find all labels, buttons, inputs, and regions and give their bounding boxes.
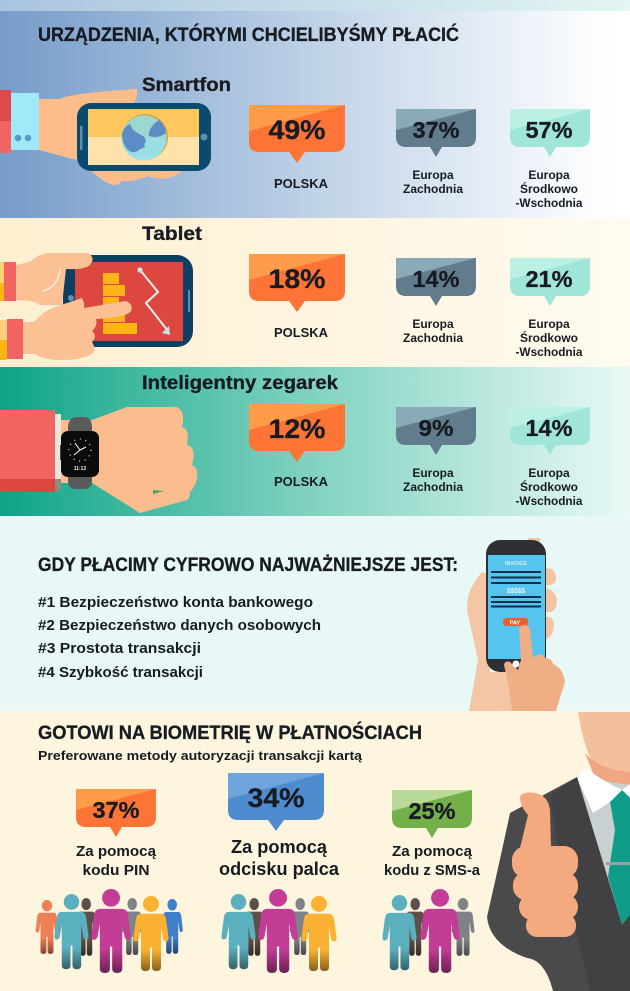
icon: hand holding smartphone	[0, 89, 211, 185]
icon: hands on tablet	[0, 253, 193, 360]
label: PIN	[76, 843, 157, 879]
bubble: PIN 37%: 37%	[92, 797, 140, 823]
bubble: Europa Zachodnia 9%	[396, 407, 476, 455]
label: SMS: kodu z SMS-a	[384, 862, 481, 879]
bubble: Polska 12%: 12%	[268, 414, 326, 444]
bubble: Europa Zachodnia 14%: 14%	[412, 266, 460, 292]
ranked list: #2 Bezpieczeństwo danych osobowych	[38, 618, 321, 634]
heading: Tablet: Tablet	[142, 224, 203, 245]
icon: hand paying with phone: INVOICE	[505, 561, 527, 567]
bubble: Polska 49%	[249, 105, 345, 163]
label: Europa Zachodnia: Zachodnia	[403, 182, 463, 196]
label: Europa Zachodnia	[403, 168, 463, 196]
heading: Inteligentny zegarek: Inteligentny zegarek	[142, 373, 338, 394]
label: Europa Środkowo-Wschodnia: Środkowo	[520, 330, 578, 345]
label: Europa Środkowo-Wschodnia	[516, 168, 583, 210]
icon: wrist with smartwatch	[0, 407, 197, 513]
panel: smartphone	[0, 0, 630, 218]
bubble: PIN 37%	[76, 789, 156, 837]
title: URZĄDZENIA, KTÓRYMI CHCIELIBYŚMY PŁACIĆ	[38, 24, 459, 46]
heading: Smartfon: Smartfon	[142, 75, 231, 96]
ranked list: #3 Prostota transakcji	[38, 641, 201, 657]
bubble: Europa Środkowo-Wschodnia 57%	[510, 109, 590, 157]
heading: GOTOWI NA BIOMETRIĘ W PŁATNOŚCIACH	[38, 722, 422, 744]
label: Europa Środkowo-Wschodnia: -Wschodnia	[516, 494, 583, 508]
bubble: Europa Środkowo-Wschodnia 14%: 14%	[526, 415, 572, 441]
people group: 37%	[36, 889, 183, 973]
panel: what matters in digital payments	[0, 516, 630, 711]
label: fingerprint	[219, 837, 340, 879]
label: Europa Środkowo-Wschodnia: Europa	[528, 466, 570, 480]
icon: hand paying with phone: $$$$$	[507, 588, 525, 595]
bubble: Europa Środkowo-Wschodnia 57%: 57%	[526, 117, 572, 143]
label: Europa Środkowo-Wschodnia	[516, 317, 583, 359]
label: PIN: Za pomocą	[76, 843, 157, 860]
bubble: Europa Środkowo-Wschodnia 14%	[510, 407, 590, 455]
label: Europa Zachodnia: Zachodnia	[403, 480, 463, 494]
label: Europa Zachodnia	[403, 317, 463, 345]
icon: hand paying with phone: PAY	[510, 620, 521, 626]
label: Europa Środkowo-Wschodnia: Środkowo	[520, 479, 578, 494]
panel: smartwatch	[0, 367, 630, 516]
label: SMS	[384, 843, 481, 879]
label: Europa Środkowo-Wschodnia: -Wschodnia	[516, 196, 583, 210]
label: Polska: POLSKA	[274, 474, 329, 489]
bubble: Europa Środkowo-Wschodnia 21%	[510, 258, 590, 306]
bubble: fingerprint 34%: 34%	[248, 783, 304, 813]
people group: 25%	[382, 889, 474, 973]
label: Europa Środkowo-Wschodnia: -Wschodnia	[516, 345, 583, 359]
label: Polska: POLSKA	[274, 325, 329, 340]
illustration: businessman thumbs up	[487, 712, 630, 991]
heading: GDY PŁACIMY CYFROWO NAJWAŻNIEJSZE JEST:	[38, 555, 458, 576]
label: fingerprint: odcisku palca	[219, 859, 340, 879]
label: Europa Środkowo-Wschodnia	[516, 466, 583, 508]
bubble: Europa Zachodnia 9%: 9%	[418, 415, 454, 441]
label: Polska: POLSKA	[274, 176, 329, 191]
label: Europa Zachodnia: Europa	[412, 466, 454, 480]
ranked list	[38, 595, 321, 681]
bubble: Polska 12%	[249, 404, 345, 462]
ranked list: #1 Bezpieczeństwo konta bankowego	[38, 595, 313, 611]
icon: wrist with smartwatch: 11:12	[74, 466, 86, 472]
bubble: SMS 25%	[392, 790, 472, 838]
label: Europa Środkowo-Wschodnia: Środkowo	[520, 181, 578, 196]
bubble: Europa Zachodnia 14%	[396, 258, 476, 306]
people group: 34%	[221, 889, 337, 973]
icon: hand paying with phone	[467, 538, 565, 711]
bubble: SMS 25%: 25%	[408, 798, 456, 824]
label: Europa Zachodnia	[403, 466, 463, 494]
panel: tablet	[0, 218, 630, 367]
ranked list: #4 Szybkość transakcji	[38, 665, 203, 681]
bubble: Polska 18%: 18%	[268, 264, 326, 294]
label: PIN: kodu PIN	[82, 862, 150, 879]
label: Europa Zachodnia: Europa	[412, 317, 454, 331]
bubble: Polska 18%	[249, 254, 345, 312]
bubble: Polska 49%: 49%	[268, 115, 326, 145]
label: fingerprint: Za pomocą	[231, 837, 328, 857]
label: Europa Zachodnia: Zachodnia	[403, 331, 463, 345]
label: Europa Środkowo-Wschodnia: Europa	[528, 168, 570, 182]
bubble: fingerprint 34%	[228, 773, 324, 831]
bubble: Europa Zachodnia 37%	[396, 109, 476, 157]
label: Europa Zachodnia: Europa	[412, 168, 454, 182]
label: Europa Środkowo-Wschodnia: Europa	[528, 317, 570, 331]
subheading: Preferowane metody autoryzacji transakcji kartą	[38, 748, 363, 763]
panel: biometrics	[0, 711, 630, 991]
bubble: Europa Zachodnia 37%: 37%	[412, 117, 460, 143]
bubble: Europa Środkowo-Wschodnia 21%: 21%	[526, 266, 572, 292]
label: SMS: Za pomocą	[392, 843, 473, 860]
